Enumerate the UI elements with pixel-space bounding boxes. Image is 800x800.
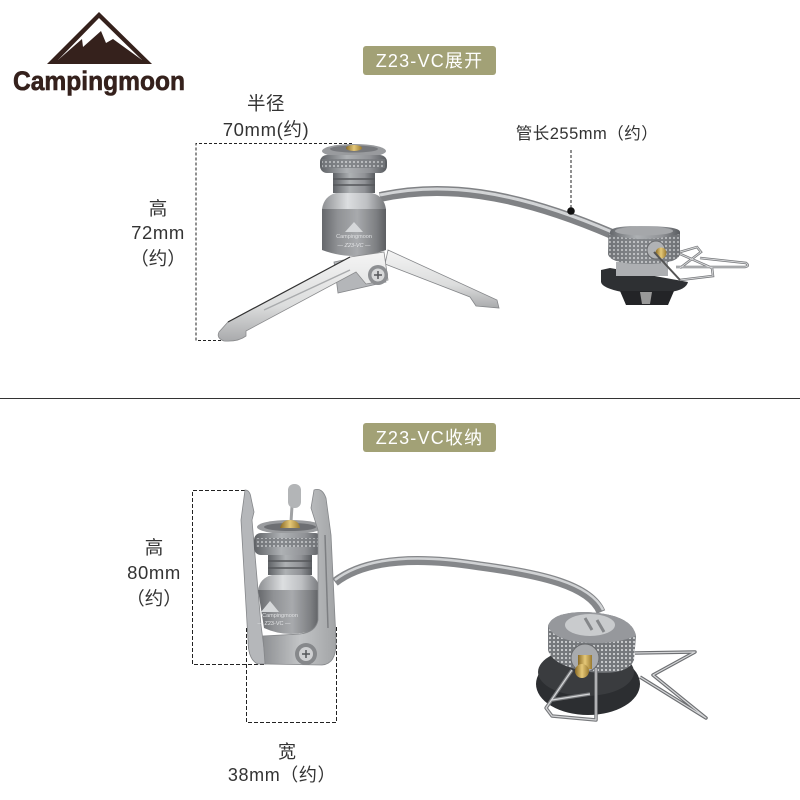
black base bbox=[601, 268, 688, 292]
nozzle bbox=[571, 644, 599, 672]
left leg bbox=[241, 490, 266, 664]
body marking: — Z23-VC — bbox=[336, 243, 371, 249]
top emblem bbox=[565, 614, 615, 636]
tube length label: 管长255mm（约） bbox=[516, 124, 658, 143]
hose bbox=[335, 560, 601, 612]
brass nozzle bbox=[647, 241, 665, 259]
brand name: Campingmoon bbox=[13, 66, 185, 96]
width label: 38mm（约） bbox=[228, 765, 336, 785]
dashed dimension box: expanded bbox=[196, 144, 352, 340]
screw bbox=[368, 265, 388, 285]
wire support: front bbox=[546, 668, 596, 720]
height label: stored: 80mm bbox=[127, 562, 181, 583]
height label: expanded: （约） bbox=[130, 248, 186, 269]
valve: expanded bbox=[601, 226, 748, 305]
rear pin bbox=[291, 490, 293, 522]
height label: expanded: 高 bbox=[149, 198, 167, 219]
hose bbox=[380, 191, 612, 234]
divider bbox=[0, 398, 800, 400]
pill heading: expanded: Z23-VC展开 bbox=[376, 51, 483, 71]
wire support bbox=[662, 246, 748, 280]
height label: expanded: 72mm bbox=[131, 222, 185, 243]
front leg bbox=[218, 252, 388, 341]
black base bbox=[536, 653, 640, 715]
base block bbox=[334, 254, 386, 293]
body marking bbox=[336, 222, 372, 249]
burner head bbox=[254, 520, 323, 575]
pill heading: stored bbox=[363, 423, 496, 452]
height label: expanded bbox=[130, 198, 186, 269]
valve: stored bbox=[536, 612, 706, 720]
radius label: 半径 bbox=[247, 93, 285, 114]
dashed dimension box: width stored bbox=[246, 627, 336, 722]
stove: expanded bbox=[218, 144, 612, 341]
body marking: Campingmoon bbox=[336, 234, 372, 240]
canister body bbox=[322, 193, 386, 209]
radius label bbox=[223, 93, 309, 140]
dashed dimension box: height stored bbox=[192, 490, 265, 664]
screw bbox=[295, 643, 317, 665]
canister body bbox=[258, 575, 320, 590]
tube pointer bbox=[567, 150, 575, 215]
height label: stored: 高 bbox=[145, 537, 163, 558]
body marking: — Z23-VC — bbox=[257, 621, 291, 627]
pill heading: stored: Z23-VC收纳 bbox=[376, 428, 483, 448]
icon: mountain bbox=[47, 12, 152, 64]
body marking: Campingmoon bbox=[262, 613, 298, 619]
height label: stored: （约） bbox=[126, 588, 182, 609]
body marking bbox=[257, 601, 298, 627]
radius label: 70mm(约) bbox=[223, 119, 309, 140]
width label bbox=[228, 742, 336, 785]
logo: Campingmoon bbox=[13, 12, 185, 96]
wire support: right bbox=[635, 652, 706, 718]
right leg and bracket bbox=[263, 489, 336, 665]
height label: stored bbox=[126, 537, 182, 609]
rear leg bbox=[385, 250, 499, 308]
knurled head bbox=[608, 226, 680, 264]
width label: 宽 bbox=[278, 742, 296, 762]
stove: stored bbox=[241, 484, 603, 665]
knurled head bbox=[548, 612, 636, 673]
burner head bbox=[320, 144, 387, 193]
pill heading: expanded bbox=[363, 46, 496, 75]
